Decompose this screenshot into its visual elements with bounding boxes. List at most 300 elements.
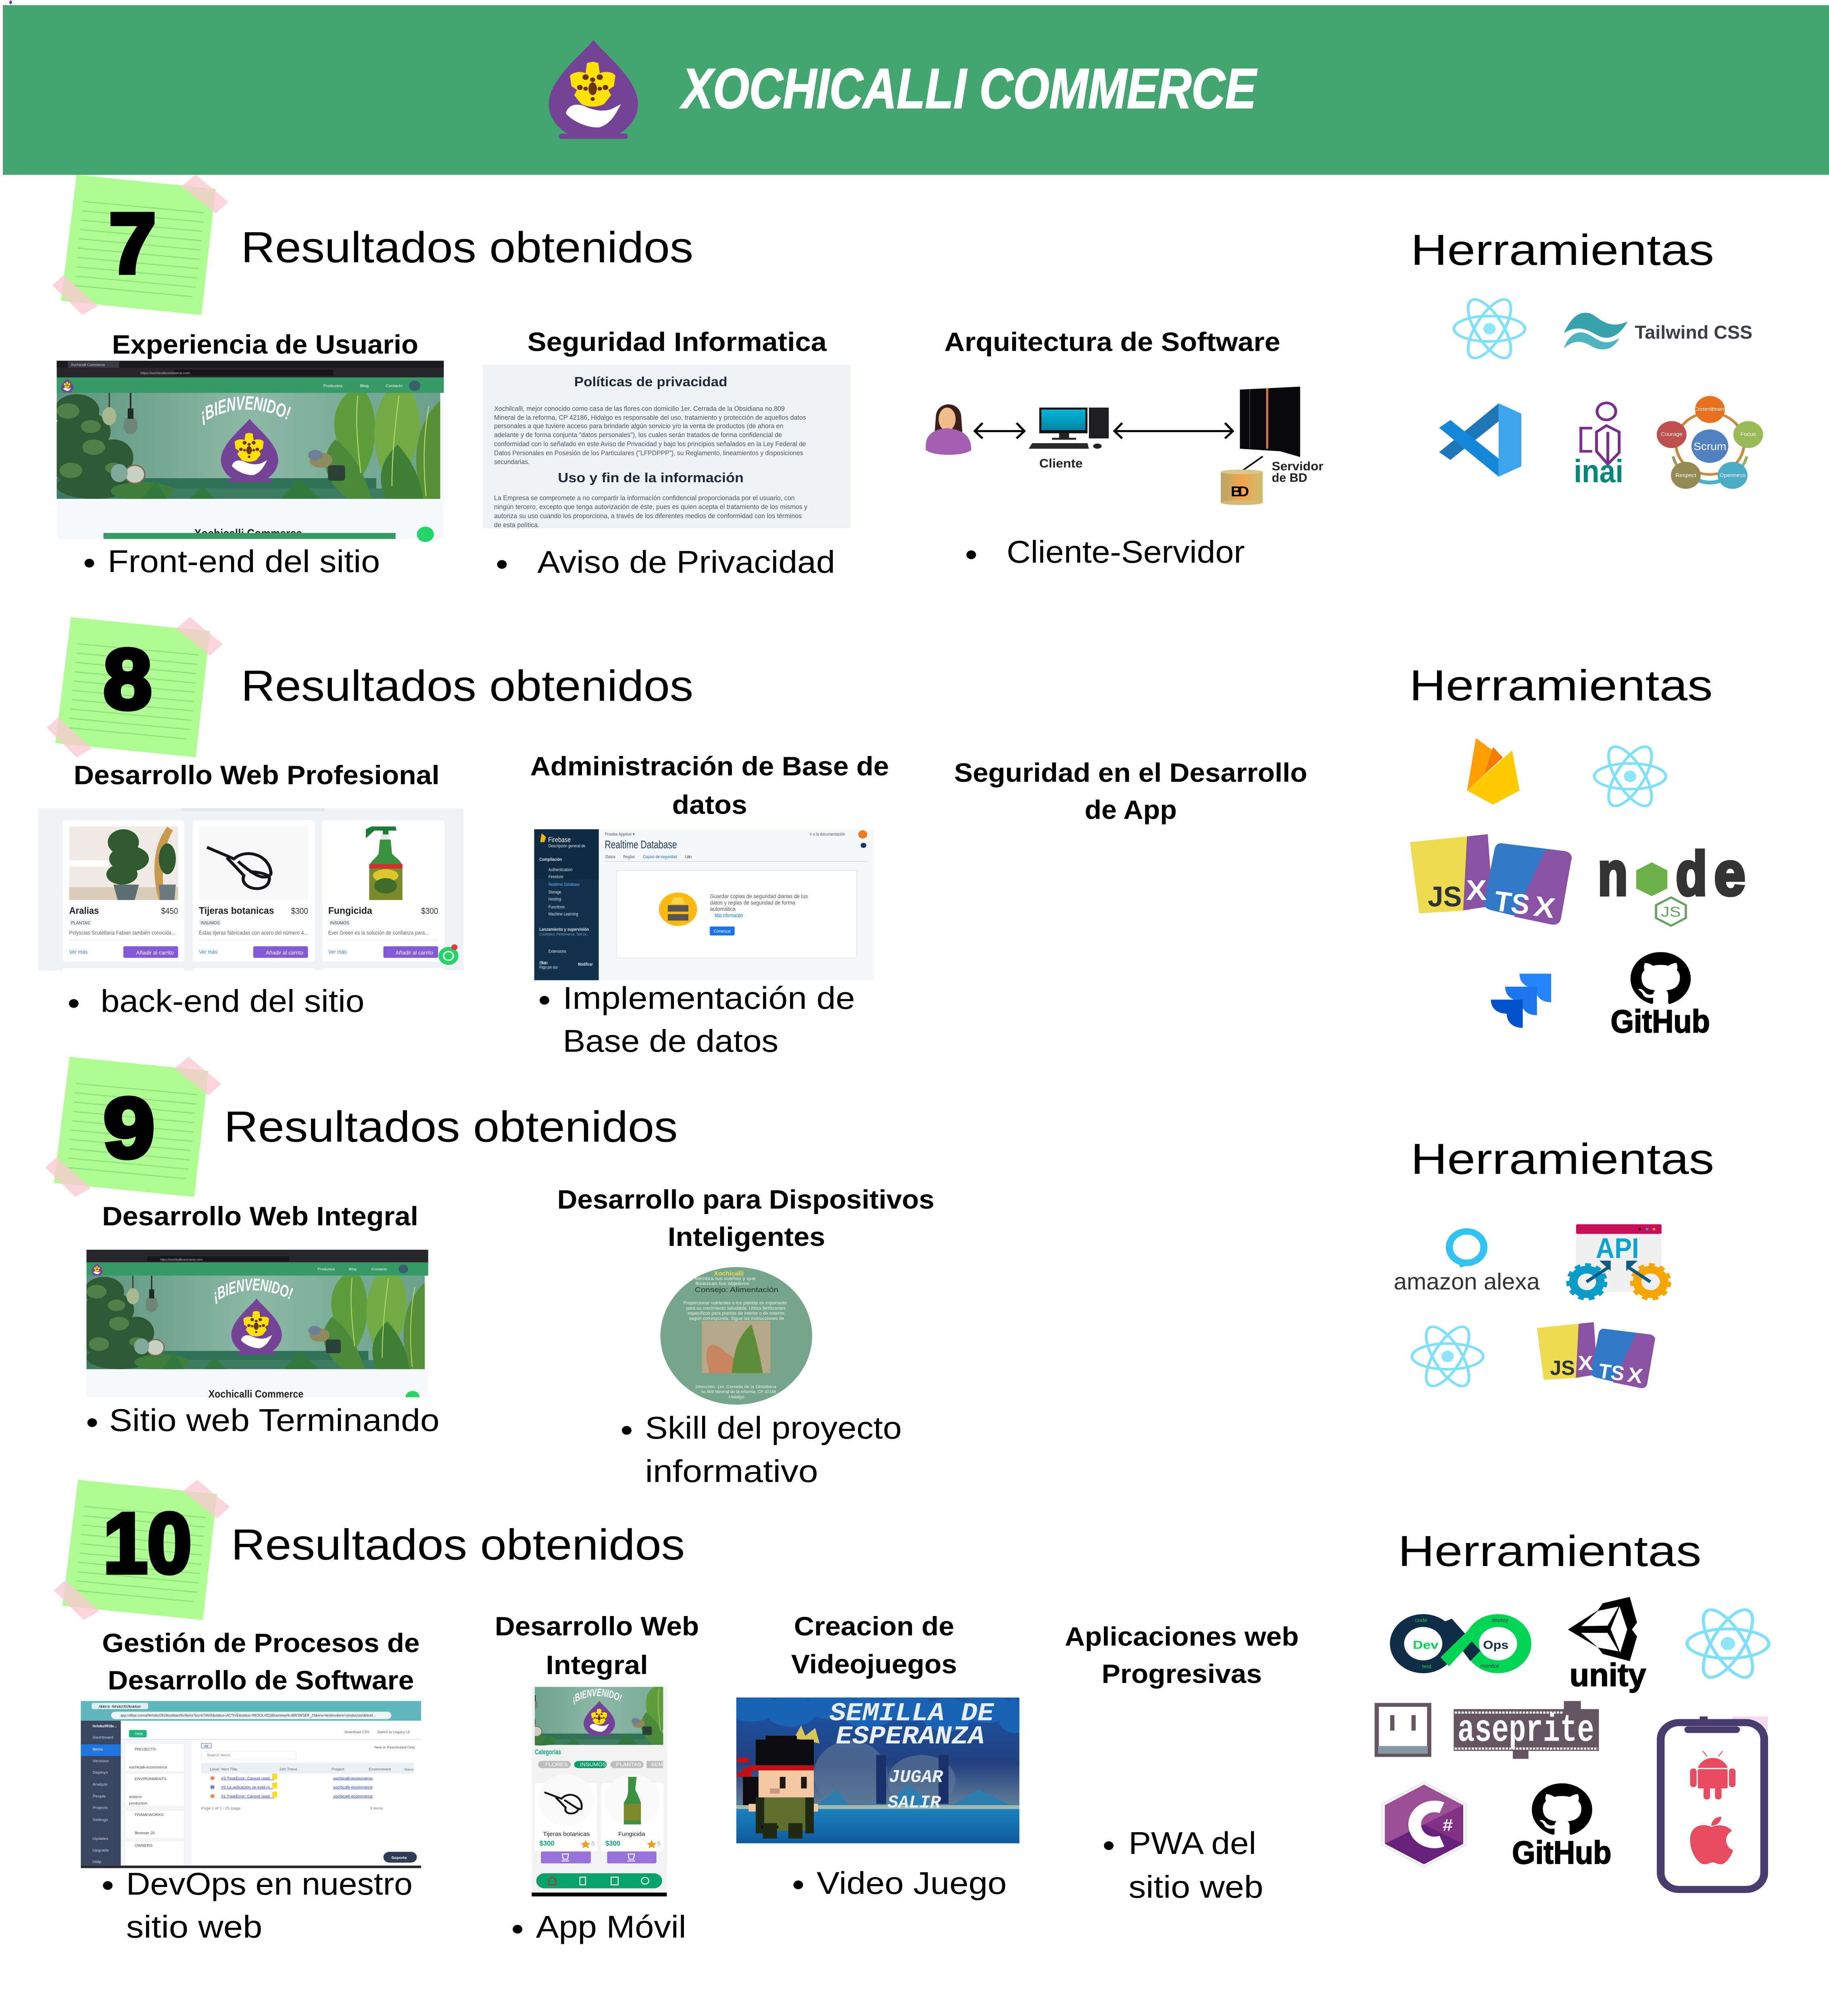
icon: jsx tsx: JS [1428, 881, 1462, 912]
icon: devops [1397, 1617, 1524, 1669]
subheading: videojuegos: Creacion de [794, 1611, 954, 1641]
screenshot: aviso de privacidad: adelante y de forma conjunta "datos personales"), los cuales serán tratados de forma confidencial de [494, 431, 782, 439]
icon: firebase [1467, 738, 1520, 805]
panel: section 9 results [45, 1057, 934, 1489]
icon: react [1594, 741, 1666, 812]
icon: csharp [1382, 1782, 1466, 1867]
screenshot: app movil: Categorías [535, 1748, 561, 1756]
screenshot: rollbar devops: xochicalli-ecommerce [333, 1785, 373, 1789]
header band [3, 5, 1829, 175]
bullet: aviso: Aviso de Privacidad [537, 545, 835, 580]
screenshot: rollbar devops: Project [332, 1767, 344, 1771]
subheading: gestion de procesos: Gestión de Procesos de [102, 1628, 420, 1658]
product card: aralias [63, 820, 184, 962]
title: XOCHICALLI COMMERCE [680, 57, 1258, 120]
screenshot: firebase console: Ir a la documentación [809, 831, 845, 837]
icon: scrum: Commitment [1694, 406, 1726, 412]
icon: jsx tsx: X [1466, 874, 1487, 906]
product card: aralias: Polyscias Scutellaria Fabian también conocida... [69, 930, 175, 936]
heading: resultados 7: Resultados obtenidos [241, 223, 693, 271]
screenshot: home del sitio [48, 361, 444, 542]
skill screen: round device: específicos para plantas de interior o de exterior, [688, 1311, 786, 1316]
screenshot: sitio web: Contacto [371, 1267, 387, 1271]
bullet: back-end: back-end del sitio [101, 984, 364, 1019]
icon: aseprite face [1377, 1705, 1429, 1755]
diagram: cliente-servidor [926, 387, 1323, 505]
icon: react [1412, 1321, 1483, 1392]
arrow: user to client [975, 423, 1024, 438]
subheading: gestion de procesos: Desarrollo de Software [108, 1665, 414, 1695]
icon: phone with android and apple [1661, 1716, 1768, 1889]
screenshot: rollbar devops: Switch to Legacy UI [377, 1730, 410, 1734]
icon: devops: Ops [1483, 1639, 1508, 1652]
screenshot: aviso de privacidad: Mineral de la reforma, CP 42186, Hidalgo es responsable del uso, tratamiento y protección de aquellos datos [494, 414, 806, 421]
bottle image [366, 827, 403, 900]
screenshot: rollbar devops: Versions [93, 1759, 109, 1763]
screenshot: home del sitio: Contacto [386, 384, 403, 388]
screenshot: firebase console: Firebase [548, 836, 571, 843]
subheading: dispositivos inteligentes [557, 1185, 934, 1252]
sticky note 10: 10 [104, 1495, 192, 1591]
screenshot: rollbar devops: production [129, 1801, 148, 1805]
bullet: video juego: Video Juego [817, 1866, 1007, 1901]
connector line [1242, 456, 1263, 471]
screenshot: sitio web [79, 1250, 428, 1400]
icon: apple [1690, 1817, 1733, 1864]
screenshot: app movil: $300 [540, 1839, 555, 1847]
heading: herramientas: Herramientas [1411, 1135, 1714, 1183]
icon: node: d [1676, 839, 1707, 908]
icon: react [1687, 1603, 1769, 1684]
screenshot: firebase console: Hosting [548, 896, 561, 902]
screenshot: rollbar devops: People [93, 1794, 106, 1799]
screenshot: firebase console: Lanzamiento y supervisión [539, 927, 589, 932]
icon: github [1512, 1783, 1611, 1870]
heading: herramientas: Herramientas [1409, 661, 1713, 710]
sticky note 10 [54, 1480, 230, 1620]
screenshot: firebase console: Realtime Database [548, 882, 580, 887]
skill screen: round device: Proporcionar nutrientes a tus plantas es importante [683, 1301, 787, 1306]
screenshot: home del sitio: Productos [323, 384, 342, 388]
sticky note 9 [45, 1057, 221, 1197]
screenshot: sitio web: https://xochicallicommerce.com [160, 1258, 203, 1261]
product card: aralias: Ver más [69, 949, 88, 955]
screenshot: firebase console: Firestore [548, 874, 563, 879]
screenshot: firebase console: Modificar [578, 961, 593, 967]
screenshot: firebase console: Realtime Database [605, 839, 677, 851]
screenshot: rollbar devops: app.rollbar.com/a/ferhdez0918esteban/fix/items?prj=674605&status=ACTIVE&status=RESOLVED&framework=BROWSER_JS&env=testenv&env=produccion&level... [121, 1713, 376, 1718]
screenshot: rollbar devops: xochicalli-ecommerce [333, 1794, 373, 1799]
product card: fungicida: Ver más [328, 949, 347, 955]
screenshot: aviso de privacidad: La Empresa se compromete a no compartir la información confidencial proporcionada por el usuario, con [494, 494, 795, 502]
screenshot: sitio web: ¡BIENVENIDO! [211, 1275, 294, 1306]
subheading: desarrollo web integral: Desarrollo Web [495, 1611, 699, 1641]
screenshot: aviso de privacidad: personales a que tuviere acceso para brindarle algún servicio y/o la venta de productos (de ahora en [494, 422, 783, 430]
icon: amazon alexa: amazon alexa [1394, 1268, 1540, 1294]
icon: android [1690, 1751, 1735, 1799]
product card: tijeras: Tijeras botanicas [199, 906, 274, 916]
icon: csharp: # [1443, 1816, 1453, 1835]
skill screen: round device: Consejo: Alimentación [695, 1286, 778, 1294]
icon: jsx tsx: X [1626, 1363, 1644, 1388]
screenshot: firebase console: Prueba Apptive ▾ [605, 831, 635, 837]
subheading: desarrollo web integral: Desarrollo Web Integral [102, 1201, 418, 1231]
screenshot: rollbar devops: ENVIRONMENTS [135, 1776, 167, 1781]
icon: unity: unity [1570, 1657, 1646, 1693]
skill screen: round device [661, 1267, 812, 1405]
skill screen: round device: Dirección: 1er. Cerrada de la Obsidiana [695, 1385, 776, 1389]
screenshot: rollbar devops: 3 items [370, 1806, 383, 1810]
panel: section 10 results [54, 1480, 1299, 1945]
screenshot: firebase console: Authentication [548, 867, 573, 872]
icon: scrum [1657, 396, 1763, 489]
bullet: devops [103, 1867, 413, 1945]
subheading: dispositivos inteligentes: Desarrollo para Dispositivos [557, 1185, 934, 1214]
screenshot: app movil: $300 [605, 1839, 620, 1847]
subheading: videojuegos: Videojuegos [791, 1649, 957, 1679]
labels [1039, 456, 1323, 484]
screenshot: rollbar devops: 24h Trend [279, 1767, 297, 1771]
product card: tijeras: Ver más [199, 949, 217, 955]
screenshot: app movil: PLANTAS [616, 1762, 641, 1768]
bullet: devops: sitio web [126, 1910, 262, 1945]
sticky note 8: 8 [104, 631, 152, 727]
product card: fungicida [322, 820, 444, 962]
icon: jsx tsx [1410, 834, 1572, 925]
subheading: aplicaciones web progresivas: Aplicaciones web [1065, 1622, 1299, 1652]
panel: tools 10 [1377, 1527, 1769, 1889]
icon: inai [1574, 403, 1623, 489]
heading: resultados 8: Resultados obtenidos [241, 662, 693, 710]
screenshot: firebase console: Crashlytics, Performance, Test La... [539, 932, 589, 937]
icon: jsx tsx: X [1578, 1352, 1593, 1375]
screenshot: rollbar devops [81, 1701, 421, 1868]
icon: server [1240, 387, 1300, 457]
screenshot: videojuego [726, 1693, 1032, 1843]
panel: section 7 results [48, 175, 1323, 580]
icon: jsx tsx: TS [1597, 1360, 1626, 1385]
bullet: front-end: Front-end del sitio [108, 544, 380, 579]
product card: tijeras: $300 [291, 906, 308, 916]
icon: devops: code [1415, 1617, 1427, 1623]
icon: scrum: Courage [1661, 431, 1683, 437]
screenshot: firebase console: Extensions [548, 948, 566, 954]
screenshot: firebase console: Reglas [623, 854, 635, 859]
arrow: client to server [1114, 423, 1233, 438]
skill screen: round device: Xochicalli [714, 1270, 744, 1277]
bullet: skill [622, 1411, 902, 1489]
icon: computer [1028, 408, 1109, 449]
subheading: administracion base de datos: Administración de Base de [530, 751, 889, 781]
icon: vscode [1439, 403, 1521, 477]
icon: devops: monitor [1480, 1663, 1499, 1669]
icon: tailwind [1564, 313, 1752, 350]
bullet: implementacion: Base de datos [563, 1024, 778, 1059]
subheading: desarrollo web integral: Integral [546, 1650, 648, 1680]
icon: jsx tsx [1537, 1322, 1655, 1388]
bullet: implementacion [540, 981, 855, 1059]
screenshot: rollbar devops: Status [404, 1768, 414, 1771]
icon: node: n [1598, 839, 1628, 908]
icon: scrum: Openness [1720, 473, 1746, 478]
subheading: desarrollo web integral [495, 1611, 699, 1680]
labels: Cliente [1039, 456, 1082, 470]
screenshot: home del sitio: Blog [360, 384, 369, 388]
screenshot: rollbar devops: Level [210, 1767, 219, 1771]
labels: de BD [1272, 471, 1307, 484]
screenshot: aviso de privacidad: de esta política. [494, 521, 540, 529]
bullet: pwa [1104, 1826, 1263, 1905]
subheading: seguridad en el desarrollo [954, 758, 1307, 825]
screenshot: rollbar devops: Browser JS [135, 1831, 155, 1835]
sticky note 7: 7 [109, 196, 156, 291]
bullet: pwa: PWA del [1128, 1826, 1256, 1861]
screenshot: videojuego: ESPERANZA [836, 1722, 985, 1752]
panel: tools 9 [1394, 1135, 1714, 1392]
screenshot: rollbar devops: FRAMEWORKS [135, 1813, 163, 1817]
icon: jsx tsx: X [1532, 890, 1557, 924]
screenshot: productos [38, 808, 464, 971]
screenshot: rollbar devops: Item Title [221, 1767, 237, 1771]
whatsapp button [438, 944, 459, 965]
icon: database [1221, 470, 1263, 505]
bullet: sitio web: Sitio web Terminando [109, 1403, 440, 1438]
screenshot: home del sitio: Xochicalli Commerce [71, 363, 105, 367]
screenshot: aviso de privacidad: Políticas de privacidad [574, 375, 727, 389]
screenshot: firebase console: Pago por uso [539, 964, 558, 970]
screenshot: app movil: 5 [591, 1841, 595, 1847]
icon: amazon alexa [1394, 1231, 1540, 1294]
screenshot: rollbar devops: New or Reactivated Only [374, 1745, 415, 1749]
screenshot: firebase console: Datos [605, 854, 615, 859]
icon: inai: inai [1574, 453, 1623, 489]
screenshot: firebase console: Machine Learning [548, 911, 578, 916]
screenshot: rollbar devops: testenv [129, 1795, 142, 1799]
product card: tijeras [193, 820, 315, 962]
screenshot: sitio web: Productos [317, 1267, 335, 1271]
screenshot: rollbar devops: #3 TypeError: Cannot read ... [221, 1776, 274, 1781]
screenshot: rollbar devops: Search Items [207, 1753, 230, 1757]
screenshot: rollbar devops: xochicalli-ecommerce [333, 1776, 373, 1781]
bullet: cliente-servidor: Cliente-Servidor [1007, 535, 1245, 570]
screenshot: app movil: ¡BIENVENIDO! [571, 1687, 623, 1705]
screenshot: videojuego: SALIR [888, 1793, 941, 1813]
product card: fungicida: Ever Green es la solución de confianza para... [328, 930, 429, 936]
screenshot: sitio web: Blog [349, 1267, 357, 1271]
icon: scrum: Scrum [1693, 441, 1726, 452]
icon: scrum: Focus [1740, 431, 1756, 437]
icon: api: API [1596, 1232, 1639, 1264]
icon: devops: Dev [1413, 1639, 1439, 1652]
screenshot: app movil: INSUMOS [580, 1762, 606, 1768]
screenshot: rollbar devops: xochicalli-ecommerce [129, 1765, 167, 1769]
screenshot: app movil: Tijeras botanicas [543, 1831, 590, 1837]
product card: fungicida: Fungicida [328, 906, 372, 916]
icon: github [1611, 952, 1710, 1039]
icon: unity [1568, 1597, 1646, 1693]
screenshot: aviso de privacidad: Xochilcalli, mejor conocido como casa de las flores con domicilio 1er. Cerrada de la Obsidiana no.809 [494, 405, 785, 412]
screenshot: aviso de privacidad: Uso y fin de la información [558, 470, 744, 485]
product card: fungicida: Añadir al carrito [396, 950, 433, 956]
skill screen: round device: siembra tus sueños y que [695, 1276, 756, 1281]
subheading: seguridad en el desarrollo: Seguridad en el Desarrollo [954, 758, 1307, 787]
icon: devops: test [1422, 1664, 1431, 1669]
screenshot: firebase console: automática [710, 906, 736, 912]
screenshot: home del sitio: https://xochicallicommerce.com [140, 371, 190, 375]
skill screen: round device: florezcan tus objetivos [695, 1281, 749, 1286]
screenshot: aviso de privacidad [483, 364, 851, 529]
icon: aseprite wordmark: aseprite [1458, 1709, 1594, 1753]
screenshot: app movil: FLORES [545, 1762, 568, 1768]
screenshot: aviso de privacidad: secundarias. [494, 458, 530, 466]
icon: jsx tsx: JS [1550, 1356, 1575, 1379]
icon: react [1454, 294, 1525, 364]
icon: github: GitHub [1611, 1003, 1710, 1039]
product card: tijeras: Añadir al carrito [266, 950, 303, 956]
heading: resultados 10: Resultados obtenidos [231, 1520, 685, 1569]
screenshot: aviso de privacidad: conformidad con lo señalado en este Aviso de Privacidad y bajo los principios señalados en la Ley Federal de [494, 440, 806, 448]
heading: herramientas: Herramientas [1398, 1527, 1702, 1575]
subheading: dispositivos inteligentes: Inteligentes [668, 1222, 825, 1252]
screenshot: aviso de privacidad: ningún tercero, excepto que tenga autorización de éste, pues es quien acepta el tratamiento de los mismos y [494, 503, 807, 511]
screenshot: app movil [489, 1687, 704, 1896]
icon: node: e [1714, 839, 1746, 908]
bullet: pwa: sitio web [1128, 1870, 1263, 1905]
screenshot: firebase console: Copias de seguridad [643, 854, 677, 859]
bullet: app movil: App Móvil [536, 1910, 686, 1945]
bullet: implementacion: Implementación de [563, 981, 855, 1016]
screenshot: videojuego: SEMILLA DE [830, 1699, 995, 1729]
sticky note 9: 9 [104, 1080, 154, 1175]
screenshot: videojuego: JUGAR [889, 1768, 943, 1788]
screenshot: firebase console [534, 829, 874, 980]
icon: Xochicalli logo [548, 40, 638, 139]
screenshot: rollbar devops: Dashboard [93, 1736, 113, 1740]
sticky note 8 [47, 617, 223, 757]
product card: tijeras: INSUMOS [200, 920, 220, 926]
sticky note 7 [52, 175, 228, 315]
screenshot: app movil: Fungicida [618, 1831, 645, 1837]
screenshot: rollbar devops: Hide [135, 1732, 143, 1736]
screenshot: rollbar devops: PROJECTS [135, 1747, 156, 1751]
subheading: experiencia de usuario: Experiencia de Usuario [112, 329, 418, 359]
screenshot: firebase console: Compilación [539, 856, 562, 862]
screenshot: rollbar devops: Deploys [93, 1771, 108, 1775]
screenshot: rollbar devops: Upgrade [93, 1848, 109, 1853]
subheading: videojuegos [791, 1611, 957, 1679]
screenshot: firebase console: Guardar copias de seguridad diarias de tus [710, 893, 808, 900]
product card: aralias: Aralias [69, 906, 99, 916]
screenshot: rollbar devops: Analyze [93, 1783, 108, 1787]
screenshot: firebase console: datos y reglas de seguridad de forma [710, 900, 795, 906]
subheading: seguridad en el desarrollo: de App [1084, 795, 1177, 825]
icon: aseprite wordmark [1454, 1701, 1599, 1759]
screenshot: firebase console: Blaze [539, 960, 548, 965]
icon: tailwind: Tailwind CSS [1635, 322, 1752, 343]
product card: tijeras: Estas tijeras fabricadas con acero del número 4... [199, 930, 308, 936]
labels: Servidor [1272, 459, 1323, 473]
screenshot: rollbar devops: #1 TypeError: Cannot read ... [221, 1794, 274, 1799]
subheading: arquitectura: Arquitectura de Software [944, 327, 1280, 357]
screenshot: rollbar devops: Items [93, 1747, 103, 1752]
heading: resultados 9: Resultados obtenidos [224, 1103, 678, 1151]
bullet: skill: informativo [645, 1454, 818, 1489]
screenshot: rollbar devops: Settings [93, 1818, 108, 1822]
screenshot: home del sitio: ¡BIENVENIDO! [198, 392, 292, 427]
subheading: desarrollo web profesional: Desarrollo Web Profesional [74, 760, 440, 790]
screenshot: firebase console: Descripción general de [548, 843, 585, 848]
screenshot: rollbar devops: Environment [369, 1767, 391, 1771]
tiny logo mark [9, 0, 12, 4]
screenshot: rollbar devops: Projects [93, 1806, 108, 1810]
icon: github: GitHub [1512, 1835, 1611, 1870]
screenshot: app movil: SEMI [651, 1762, 665, 1768]
icon: api [1568, 1224, 1669, 1299]
subheading: seguridad: Seguridad Informatica [528, 327, 827, 357]
screenshot: rollbar devops: All items - ferhdez0918esteban [98, 1704, 141, 1709]
screenshot: firebase console: Comenzar [714, 929, 731, 934]
product card: aralias: PLANTAS [71, 920, 90, 926]
pixel character [737, 1736, 818, 1839]
icon: database: BD [1230, 484, 1249, 499]
skill screen: round device: no.809 Mineral de la reforma, CP 42186 [701, 1389, 776, 1394]
screenshot: rollbar devops: #2 La aplicación se está ni... [221, 1785, 273, 1789]
icon: scrum: Respect [1675, 473, 1696, 478]
skill screen: round device: para su crecimiento saludable. Utiliza fertilizantes [686, 1306, 786, 1311]
screenshot: aviso de privacidad: Datos Personales en Posesión de los Particulares ("LFPDPPP"), su Reglamento, lineamientos y disposiciones [494, 449, 803, 457]
icon: node: JS [1661, 904, 1681, 920]
screenshot: app movil: 5 [657, 1841, 661, 1847]
subheading: administracion base de datos [530, 751, 889, 820]
screenshot: rollbar devops: Help [93, 1860, 102, 1864]
screenshot: sitio web: Xochicalli Commerce [209, 1388, 303, 1400]
skill screen: round device: Hidalgo [729, 1395, 745, 1400]
icon: devops: deploy [1491, 1617, 1508, 1623]
product card: aralias: Añadir al carrito [136, 950, 174, 956]
screenshot: firebase console: Storage [548, 889, 561, 895]
heading: herramientas: Herramientas [1411, 226, 1714, 274]
product card: fungicida: $300 [421, 906, 438, 916]
screenshot: firebase console: Functions [548, 904, 565, 910]
screenshot: rollbar devops: All [204, 1744, 208, 1748]
screenshot: rollbar devops: OWNERS [135, 1843, 152, 1848]
screenshot: firebase console: Uso [685, 854, 692, 859]
icon: node [1598, 839, 1746, 926]
icon: jsx tsx: TS [1492, 885, 1532, 921]
product card: fungicida: INSUMOS [330, 920, 349, 926]
screenshot: rollbar devops: Soporte [391, 1856, 407, 1860]
icon: user [926, 404, 971, 455]
panel: section 8 results [38, 617, 1307, 1059]
subheading: aplicaciones web progresivas [1065, 1622, 1299, 1689]
subheading: administracion base de datos: datos [672, 790, 747, 820]
subheading: aplicaciones web progresivas: Progresivas [1102, 1659, 1262, 1689]
screenshot: rollbar devops: Updates [93, 1837, 108, 1841]
skill screen: round device: según corresponda. Sigue las instrucciones de [689, 1316, 784, 1321]
screenshot: firebase console: Más información [715, 913, 743, 919]
bullet: devops: DevOps en nuestro [126, 1867, 413, 1901]
screenshot: rollbar devops: ferhdez0918e... [93, 1724, 117, 1729]
product card: aralias: $450 [161, 906, 178, 916]
screenshot: home del sitio: Xochicalli Commerce [194, 526, 302, 540]
screenshot: aviso de privacidad: autoriza su uso cuando los proporciona, a través de los diferentes medios de conformidad con los términos [494, 512, 802, 520]
icon: jira [1491, 974, 1551, 1028]
panel: tools 8 [1409, 661, 1746, 1039]
bullet: skill: Skill del proyecto [645, 1411, 902, 1445]
screenshot: rollbar devops: Page 1 of 1 · 25 /page [201, 1806, 240, 1810]
subheading: gestion de procesos [102, 1628, 420, 1695]
panel: tools 7 [1411, 226, 1763, 489]
